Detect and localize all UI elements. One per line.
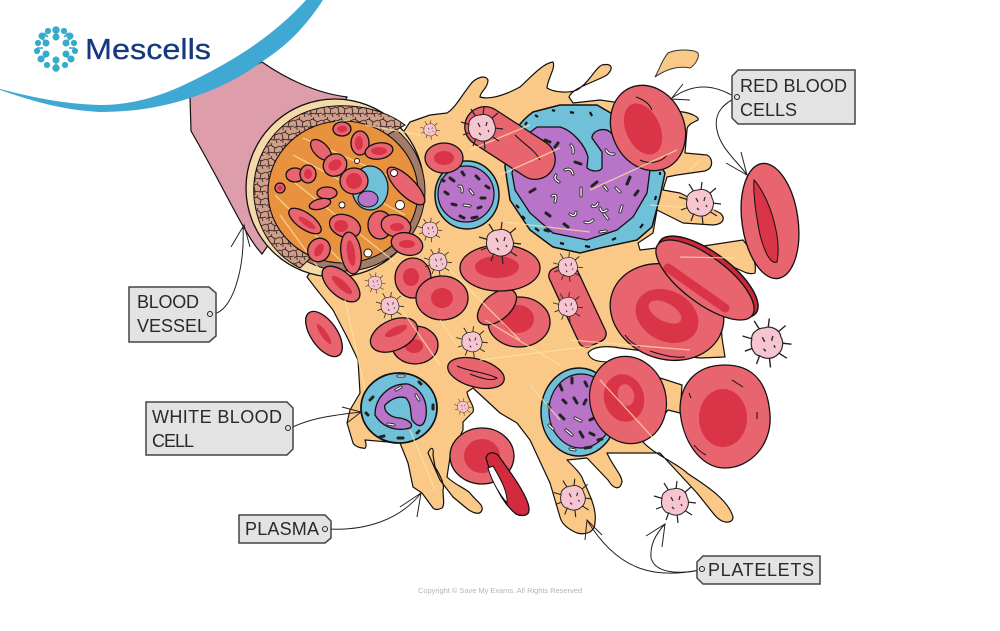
red blood cell: rear stacked [395,258,431,298]
plasma [307,62,755,534]
label: white blood cell [146,402,293,455]
label: white blood cell: CELL [152,431,194,451]
red blood cell: large centre right [596,248,738,376]
logo wordmark: Mescells [85,34,211,66]
blood vessel tube [190,62,347,254]
white blood cell: lower left [361,373,437,443]
label: plasma: PLASMA [245,519,319,539]
label: platelets: PLATELETS [708,560,814,580]
vessel brown band [265,111,425,271]
vessel cobblestone layer [254,106,405,268]
copyright: Copyright © Save My Exams. All Rights Reserved [418,586,582,595]
arrows [213,84,747,573]
plasma fragment [655,50,698,77]
vessel streaks [275,120,420,270]
label: red blood cells [732,70,855,124]
label: plasma [239,515,331,543]
red blood cell: lower middle [444,352,508,394]
label: white blood cell: WHITE BLOOD [152,407,282,427]
red blood cell: far lower right [680,365,770,468]
red blood cell: top large [597,73,699,183]
plasma streaks [345,125,735,490]
red blood cell: centre left [416,276,468,320]
red blood cell: bottom with dark rolled cell [450,428,529,515]
logo [34,27,211,71]
white blood cell: small top [435,161,499,229]
white blood cell: large [505,105,665,253]
label: platelets [697,556,820,584]
red blood cell: bar centre right [546,260,609,350]
red blood cell: top bar [457,99,563,187]
blood vessel cross-section [246,99,430,308]
label: red blood cells: CELLS [740,100,797,120]
red blood cell: lower right large [580,348,676,452]
label: blood vessel [129,287,216,342]
red blood cell: small top [425,143,463,173]
label: blood vessel: BLOOD [137,292,199,312]
red blood cell: side view ellipse [644,222,770,334]
red blood cell pair [365,311,438,364]
white blood cell: lower right [541,368,617,456]
vessel lumen [268,121,418,263]
header curve [0,0,323,112]
label: blood vessel: VESSEL [137,316,207,336]
vessel platelets [339,158,404,257]
platelets [364,107,792,523]
label: red blood cells: RED BLOOD [740,76,847,96]
logo icon [34,27,78,71]
vessel outer wall [246,99,424,277]
red blood cell: centre stacked [460,245,550,347]
vessel red blood cells [275,122,430,308]
red blood cell: far right [734,160,806,282]
red blood cell: capsule left [298,305,350,363]
